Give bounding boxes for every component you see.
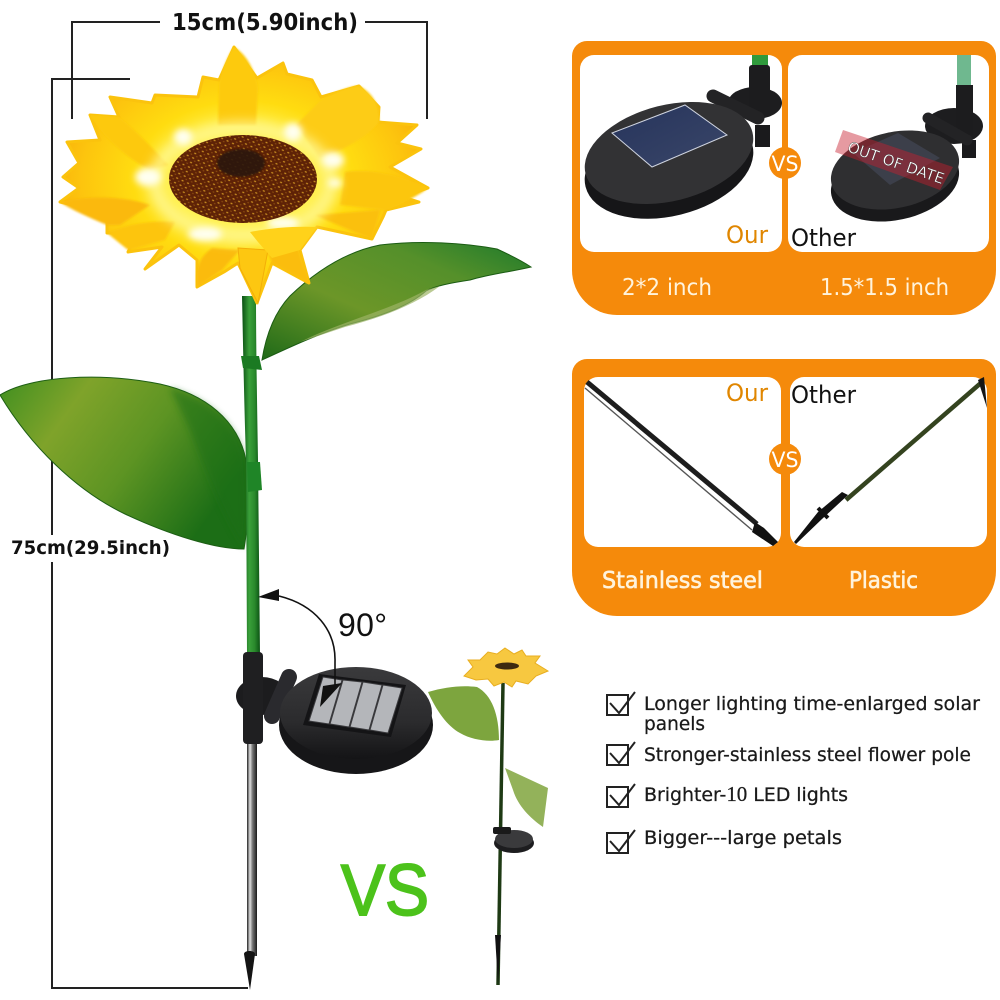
our solar light (573, 55, 782, 235)
green VS label: VS (341, 851, 429, 931)
left caption: Stainless steel (602, 568, 763, 594)
check item: bigger (607, 827, 842, 853)
LED glow spots (135, 123, 344, 241)
other solar cell (853, 133, 940, 185)
small flower centre (495, 662, 519, 670)
right white card (788, 55, 989, 252)
check item: longer lighting: panels (644, 713, 705, 735)
right caption: Plastic (849, 568, 918, 594)
left caption: 2*2 inch (622, 275, 712, 301)
check item: bigger: Bigger---large petals (644, 827, 842, 849)
feature checklist (607, 692, 980, 853)
solar panel cells (309, 677, 402, 733)
stainless steel pole (585, 382, 778, 546)
small stem (498, 683, 503, 985)
mounting ring and socket (236, 652, 288, 744)
small lower leaf (505, 768, 548, 827)
disc dark centre (217, 149, 265, 177)
seed disc (169, 135, 317, 223)
arrowhead down (320, 683, 342, 707)
panel: pole material comparison (572, 359, 996, 616)
our label: Our (726, 221, 768, 249)
check item: brighter: Brighter-10 LED lights (644, 782, 848, 806)
solar panel housing (279, 667, 433, 774)
upper right leaf (262, 242, 531, 360)
angle label: 90° (338, 607, 387, 643)
our label: Our (726, 379, 768, 407)
height dimension bracket (11, 79, 248, 988)
check item: stronger: Stronger-stainless steel flower pole (644, 744, 971, 766)
hinge (272, 677, 289, 716)
front glowing petal (250, 227, 317, 258)
arrowhead left (258, 589, 279, 601)
out of date text: OUT OF DATE (845, 138, 947, 188)
small flower (464, 648, 548, 687)
small sunflower stake (428, 648, 548, 985)
lower left leaf (0, 377, 248, 549)
left white card (580, 55, 782, 252)
small solar panel (493, 827, 534, 853)
other solar light (824, 55, 983, 233)
light glow ring (155, 128, 331, 236)
right white card (790, 377, 987, 547)
flower stem (241, 296, 262, 655)
pole spike (244, 951, 255, 990)
small spike (495, 935, 501, 984)
height label: 75cm(29.5inch) (11, 537, 170, 559)
VS badge: VS (772, 152, 798, 176)
VS badge (769, 443, 801, 475)
out of date stamp band (835, 130, 953, 190)
sunflower head (60, 47, 428, 303)
other label: Other (791, 381, 856, 409)
small upper leaf (428, 686, 499, 741)
check item: longer lighting (607, 692, 980, 735)
other label: Other (791, 224, 856, 252)
front centre petal (238, 248, 268, 303)
solar panel frame (303, 674, 406, 737)
width label: 15cm(5.90inch) (172, 10, 358, 36)
90 degree rotation arrow (258, 589, 387, 707)
plastic pole (794, 377, 987, 544)
large sunflower stake (0, 47, 531, 990)
outer petals with soft shading (60, 47, 428, 287)
steel pole (247, 740, 257, 956)
right caption: 1.5*1.5 inch (820, 275, 949, 301)
check item: longer lighting: Longer lighting time-enlarged solar (644, 693, 980, 715)
VS badge (769, 147, 801, 179)
our solar cell (612, 105, 727, 167)
width dimension bracket (72, 10, 427, 119)
petal silhouette (60, 47, 428, 303)
VS badge: VS (772, 448, 798, 472)
left white card (584, 377, 781, 547)
panel: solar panel size comparison (572, 41, 996, 315)
